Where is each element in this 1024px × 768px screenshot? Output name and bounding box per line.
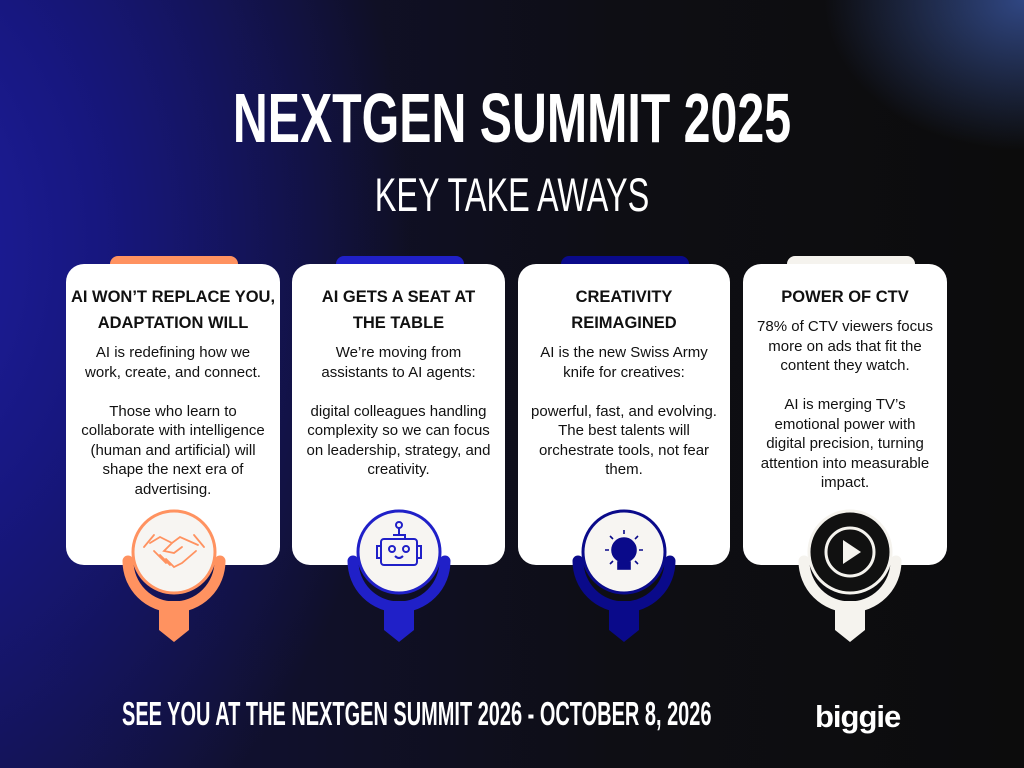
panel: card 3: REIMAGINED [571,314,677,332]
panel: card 3: CREATIVITY [576,288,672,306]
tab: card 3 [561,256,689,272]
panel: card 2: AI GETS A SEAT AT [322,288,475,306]
tab: card 1 [110,256,238,272]
title: NEXTGEN SUMMIT 2025 [233,79,791,157]
footer text: SEE YOU AT THE NEXTGEN SUMMIT 2026 - OCTOBER 8, 2026 [122,695,711,732]
panel: card 1 [66,264,280,565]
panel: card 4: AI is merging TV’s emotional power with digital precision, turning attention into measurable impact. [761,396,929,491]
icon: lightbulb pin [572,510,676,642]
tab: card 4 [787,256,915,272]
panel: card 4: 78% of CTV viewers focus more on ads that fit the content they watch. [757,318,933,374]
panel: card 3: AI is the new Swiss Army knife for creatives: [540,344,708,380]
panel: card 1: Those who learn to collaborate with intelligence (human and artificial) will shape the next era of advertising. [81,402,265,498]
panel: card 2: THE TABLE [353,314,444,332]
icon: play pin [798,510,902,642]
panel: card 1: AI is redefining how we work, create, and connect. [85,344,261,380]
tab: card 2 [336,256,464,272]
icon: robot pin [348,510,450,642]
panel: card 3: powerful, fast, and evolving. The best talents will orchestrate tools, not fear them. [531,402,717,478]
subtitle: KEY TAKE AWAYS [375,168,649,221]
panel: card 4 [743,264,947,565]
panel: card 1: AI WON’T REPLACE YOU, [71,288,275,306]
panel: card 2: digital colleagues handling complexity so we can focus on leadership, strategy, and creativity. [306,402,490,478]
panel: card 2 [292,264,505,565]
panel: card 2: We’re moving from assistants to AI agents: [321,344,476,380]
panel: card 1: ADAPTATION WILL [98,314,248,332]
icon: handshake pin [122,510,226,642]
panel: card 4: POWER OF CTV [781,288,909,306]
panel: card 3 [518,264,730,565]
logo: biggie [815,699,900,734]
